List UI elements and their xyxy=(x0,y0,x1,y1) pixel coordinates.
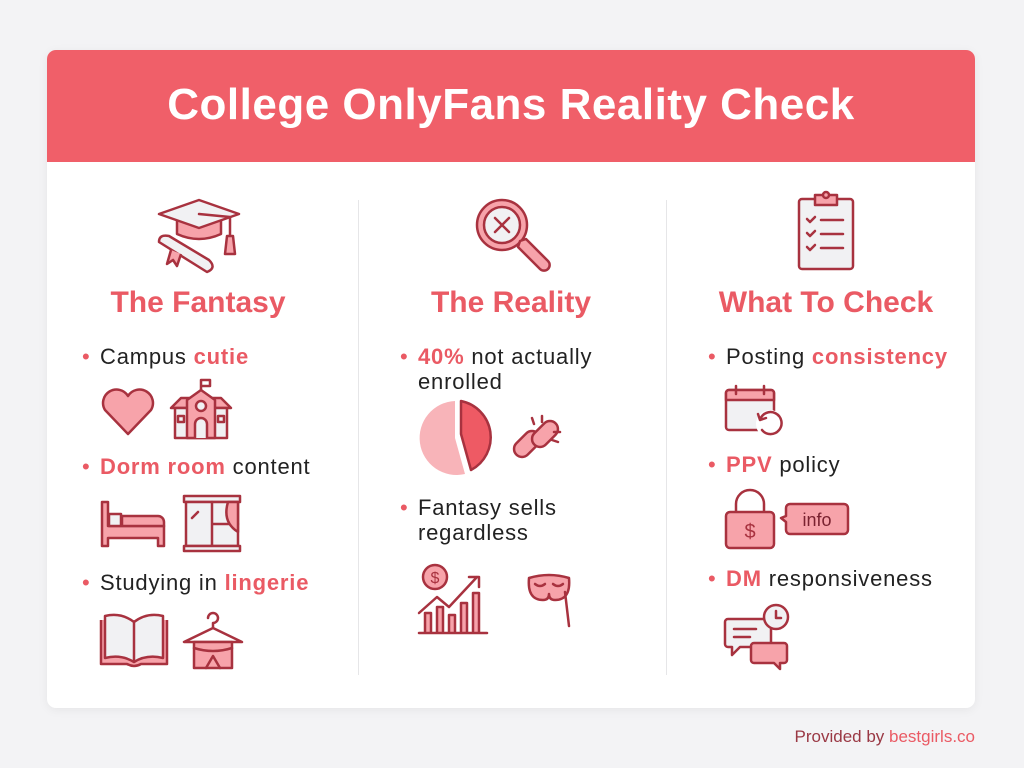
icon: window xyxy=(182,494,242,552)
icon: pie chart xyxy=(420,400,492,475)
icon: lock dollar xyxy=(724,488,776,550)
bullet: Campus cutie: Campus cutie xyxy=(100,344,249,369)
bullet: Posting consistency: Posting consistency xyxy=(726,344,948,369)
icon: book xyxy=(100,614,168,668)
bullet: 40% not actually enrolled xyxy=(418,344,592,394)
bullet: Fantasy sells regardless: Fantasy sells xyxy=(418,495,557,520)
bullet: 40% not actually enrolled: 40% not actually xyxy=(418,344,592,369)
bullet: Studying in lingerie: Studying in lingerie xyxy=(100,570,309,595)
icon: broken chain xyxy=(512,414,562,458)
icon: heart xyxy=(102,388,154,436)
bullet: 40% not actually enrolled: enrolled xyxy=(418,369,503,394)
heading: The Reality: The Reality xyxy=(431,286,591,319)
icon: school xyxy=(170,378,232,440)
icon: clipboard checklist xyxy=(798,190,854,270)
icon: hanger lingerie xyxy=(182,612,244,670)
icon: info bubble: info xyxy=(802,510,832,530)
icon: bed xyxy=(100,500,166,548)
icon: lock dollar: $ xyxy=(744,521,756,543)
icon: info bubble xyxy=(780,502,850,536)
header banner: College OnlyFans Reality Check xyxy=(167,80,855,129)
heading: The Fantasy: The Fantasy xyxy=(110,286,286,319)
icon: mask xyxy=(528,574,570,628)
icon: calendar refresh xyxy=(724,384,783,436)
card xyxy=(47,50,975,708)
icon: magnifier with x xyxy=(476,198,551,272)
bullet: DM responsiveness: DM responsiveness xyxy=(726,566,933,591)
icon: graduation cap xyxy=(158,198,240,274)
header banner xyxy=(47,50,975,162)
heading: What To Check: What To Check xyxy=(719,286,933,319)
icon: rising chart with dollar: $ xyxy=(431,570,440,587)
footer credit: Provided by bestgirls.co xyxy=(795,727,975,746)
bullet: Fantasy sells regardless xyxy=(418,495,557,545)
bullet: PPV policy: PPV policy xyxy=(726,452,840,477)
icon: chat clock xyxy=(724,604,790,670)
icon: rising chart with dollar xyxy=(418,564,488,634)
bullet: Dorm room content: Dorm room content xyxy=(100,454,310,479)
bullet: Fantasy sells regardless: regardless xyxy=(418,520,529,545)
